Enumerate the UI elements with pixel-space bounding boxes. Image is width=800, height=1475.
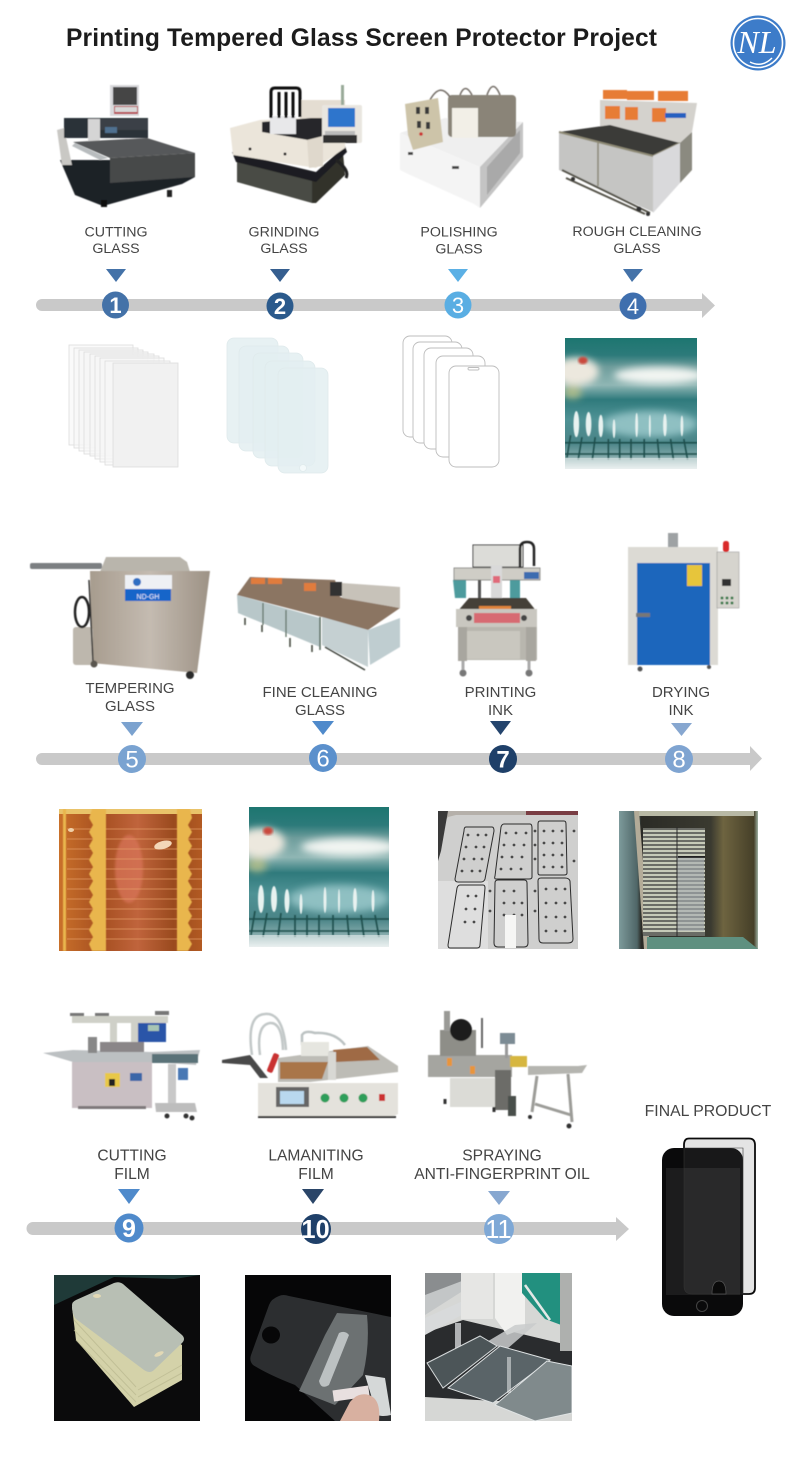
glass protector backing (684, 1138, 755, 1294)
number badge 6 (309, 744, 337, 772)
label: lamaniting film: FILM (298, 1166, 334, 1183)
label: cutting film: FILM (114, 1166, 150, 1183)
step 1: cutting glass (57, 85, 195, 467)
label: tempering glass: TEMPERING (85, 680, 175, 697)
step 9: cutting film (43, 1011, 200, 1421)
number badge 7 (489, 745, 517, 774)
phone body (662, 1148, 743, 1316)
product: cut glass sheets (69, 345, 178, 467)
pointer triangle 3 (448, 269, 468, 282)
number badge 7: 7 (496, 746, 510, 774)
label: lamaniting film: LAMANITING (268, 1148, 364, 1164)
timeline arrow row 3 (27, 1217, 629, 1241)
title: Printing Tempered Glass Screen Protector Project (66, 25, 657, 52)
number badge 3: 3 (452, 293, 464, 318)
label: polishing glass: GLASS (435, 242, 483, 258)
step 6: fine cleaning glass (237, 577, 400, 947)
number badge 8 (665, 745, 693, 774)
step 7: printing ink (438, 542, 578, 949)
machine: glass cutter (57, 85, 195, 207)
phone home button (696, 1300, 708, 1312)
final product: phone with tempered glass (662, 1138, 755, 1316)
number badge 5: 5 (125, 746, 139, 774)
pointer triangle 7 (490, 721, 511, 735)
machine: fine cleaning line (237, 577, 400, 670)
icon: company logo: NL (736, 24, 777, 60)
panel: row 1 process (36, 85, 715, 473)
label: printing ink: INK (488, 702, 513, 719)
number badge 8: 8 (672, 746, 686, 774)
label: cutting film: CUTTING (97, 1148, 167, 1164)
photo: glass in furnace (59, 809, 202, 951)
label: cutting glass: GLASS (92, 241, 140, 257)
pointer triangle 2 (270, 269, 290, 282)
label: printing ink: PRINTING (465, 684, 536, 701)
label: spraying anti-fingerprint oil: SPRAYING (462, 1148, 542, 1164)
photo: printed ink frames on tray (438, 811, 578, 949)
machine: film die cutter (43, 1011, 200, 1120)
photo: stack of film (54, 1275, 200, 1421)
pointer triangle 4 (623, 269, 643, 282)
number badge 4: 4 (627, 294, 639, 319)
number badge 9 (114, 1214, 144, 1243)
glass overlay on phone (684, 1148, 743, 1294)
product: polished glass outlines (403, 336, 499, 467)
step 4: rough cleaning glass (554, 90, 705, 469)
pointer triangle 9 (118, 1189, 140, 1204)
step 2: grinding glass (227, 85, 362, 473)
label: rough cleaning glass: GLASS (613, 241, 661, 257)
panel: row 2 process (30, 533, 762, 951)
number badge 1 (102, 292, 129, 318)
machine: rough cleaning tank (559, 90, 697, 216)
number badge 3 (444, 292, 472, 318)
label: drying ink: DRYING (652, 684, 710, 701)
label: spraying anti-fingerprint oil: ANTI-FINGERPRINT OIL (414, 1166, 590, 1183)
photo: glass in cleaning rack (237, 807, 397, 947)
number badge 5 (118, 745, 146, 774)
number badge 1: 1 (109, 293, 122, 318)
label: cutting glass: CUTTING (84, 224, 148, 240)
number badge 11: 11 (485, 1216, 512, 1244)
glass home notch (712, 1281, 726, 1294)
label: final product: FINAL PRODUCT (645, 1103, 772, 1120)
machine: tempering furnace: ND-GH (137, 594, 159, 601)
photo: peeled film on black (245, 1275, 391, 1421)
timeline arrow row 2 (36, 746, 762, 771)
pointer triangle 11 (488, 1191, 510, 1205)
label: polishing glass: POLISHING (420, 224, 498, 240)
pointer triangle 1 (106, 269, 126, 282)
machine: drying oven (628, 533, 739, 672)
number badge 9: 9 (122, 1215, 136, 1243)
pointer triangle 8 (671, 723, 692, 736)
label: tempering glass: GLASS (105, 698, 155, 715)
photo: glass racks in oven (619, 811, 758, 949)
step 8: drying ink (619, 533, 758, 949)
photo: glass in cleaning rack (554, 338, 705, 469)
machine: tempering furnace (30, 557, 210, 679)
step 11: spraying anti-fingerprint oil (414, 1011, 590, 1421)
icon: company logo (730, 16, 786, 70)
machine: film laminator (222, 1014, 398, 1118)
machine: polisher (400, 86, 523, 208)
label: grinding glass: GRINDING (249, 224, 319, 240)
machine: screen printer (453, 542, 540, 676)
phone screen (666, 1168, 740, 1295)
pointer triangle 10 (302, 1189, 324, 1204)
number badge 2: 2 (274, 294, 286, 319)
label: fine cleaning glass: GLASS (295, 702, 345, 719)
label: grinding glass: GLASS (260, 241, 308, 257)
machine: anti-fingerprint sprayer (428, 1011, 587, 1128)
photo: spray nozzle over glass (425, 1273, 572, 1421)
panel: row 3 process (27, 1011, 772, 1421)
step 3: polishing glass (400, 86, 523, 467)
timeline arrow row 1 (36, 293, 715, 318)
step 10: laminating film (222, 1014, 398, 1421)
product: ground glass pieces (227, 338, 328, 473)
label: rough cleaning glass: ROUGH CLEANING (572, 224, 702, 240)
number badge 4 (620, 292, 646, 320)
machine: glass grinder (230, 85, 362, 203)
pointer triangle 5 (121, 722, 143, 736)
step 5: tempering glass (30, 557, 210, 951)
number badge 2 (266, 292, 294, 320)
label: drying ink: INK (668, 702, 694, 719)
number badge 10: 10 (301, 1216, 330, 1244)
label: fine cleaning glass: FINE CLEANING (262, 684, 378, 701)
pointer triangle 6 (312, 721, 334, 735)
number badge 6: 6 (316, 746, 330, 772)
